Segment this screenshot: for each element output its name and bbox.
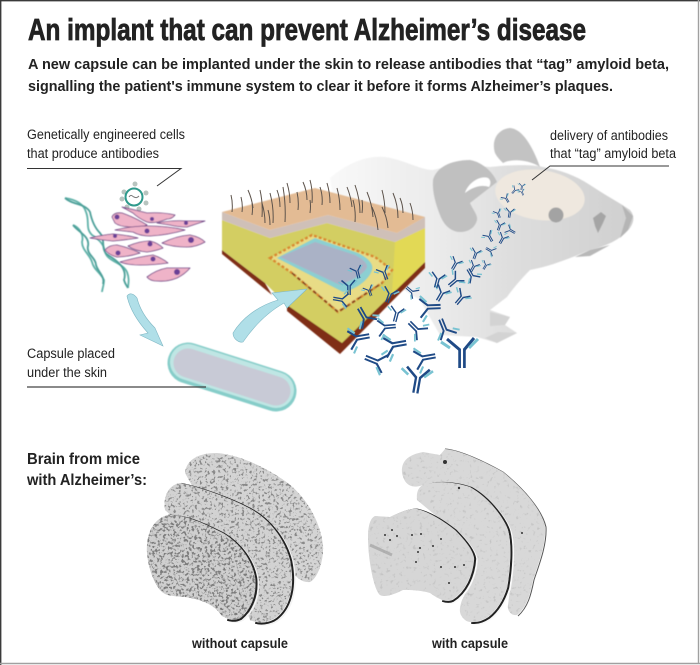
- front slice: [144, 512, 259, 622]
- subtitle: [28, 56, 669, 95]
- cells label: that produce antibodies: [27, 146, 159, 161]
- arrow to skin: [233, 289, 307, 342]
- antibodies stream: [332, 183, 526, 395]
- DNA strands: [65, 198, 129, 292]
- orange pit: [270, 235, 392, 312]
- free capsule: [188, 362, 276, 391]
- mouse illustration: [330, 128, 633, 343]
- mouse rear ear: [433, 160, 497, 232]
- brown base: [222, 250, 425, 354]
- yellow fat layer: [222, 220, 425, 344]
- back slice: [185, 453, 324, 582]
- brain label: with Alzheimer’s:: [26, 472, 147, 489]
- subtitle: signalling the patient's immune system to clear it before it forms Alzheimer’s plaques.: [28, 78, 613, 95]
- back slice: [400, 447, 550, 617]
- ear crescent: [465, 177, 490, 193]
- virus: [120, 182, 148, 212]
- cells label: [27, 127, 185, 186]
- tan top: [222, 188, 425, 233]
- head highlight: [492, 164, 588, 226]
- fold marks: [370, 545, 392, 555]
- arrow to capsule: [127, 294, 163, 346]
- jaw shadow: [575, 245, 610, 257]
- caption: with capsule: with capsule: [431, 635, 508, 651]
- capsule label: under the skin: [27, 365, 107, 380]
- pink band: [222, 212, 425, 242]
- mouse front ear: [494, 128, 540, 167]
- brain slices with capsule: [366, 447, 550, 626]
- brain label: Brain from mice: [27, 451, 140, 468]
- brain slices without capsule: [144, 450, 330, 626]
- mouse body: [330, 157, 633, 343]
- delivery label: delivery of antibodies: [550, 128, 668, 143]
- delivery label: [532, 128, 676, 180]
- implanted capsule: [277, 238, 372, 292]
- subtitle: A new capsule can be implanted under the skin to release antibodies that “tag” amyloid beta,: [28, 56, 669, 73]
- sparse plaques: [384, 460, 523, 584]
- cells label: Genetically engineered cells: [27, 127, 185, 142]
- skin block: [222, 180, 425, 354]
- caption: without capsule: without capsule: [191, 635, 288, 651]
- brain label: [26, 451, 147, 489]
- capsule label: [27, 346, 115, 380]
- paws: [485, 312, 517, 343]
- capsule leader line: [27, 386, 206, 388]
- mouse eye: [548, 208, 564, 222]
- mouse nose mark: [593, 212, 606, 233]
- capsule label: Capsule placed: [27, 346, 115, 361]
- middle slice: [160, 480, 300, 626]
- middle slice: [415, 480, 515, 626]
- front slice: [366, 506, 477, 603]
- right face: [392, 228, 425, 294]
- snout edge: [620, 205, 633, 238]
- pink cells: [90, 207, 205, 281]
- delivery label: that “tag” amyloid beta: [550, 146, 676, 161]
- hairs: [231, 180, 413, 230]
